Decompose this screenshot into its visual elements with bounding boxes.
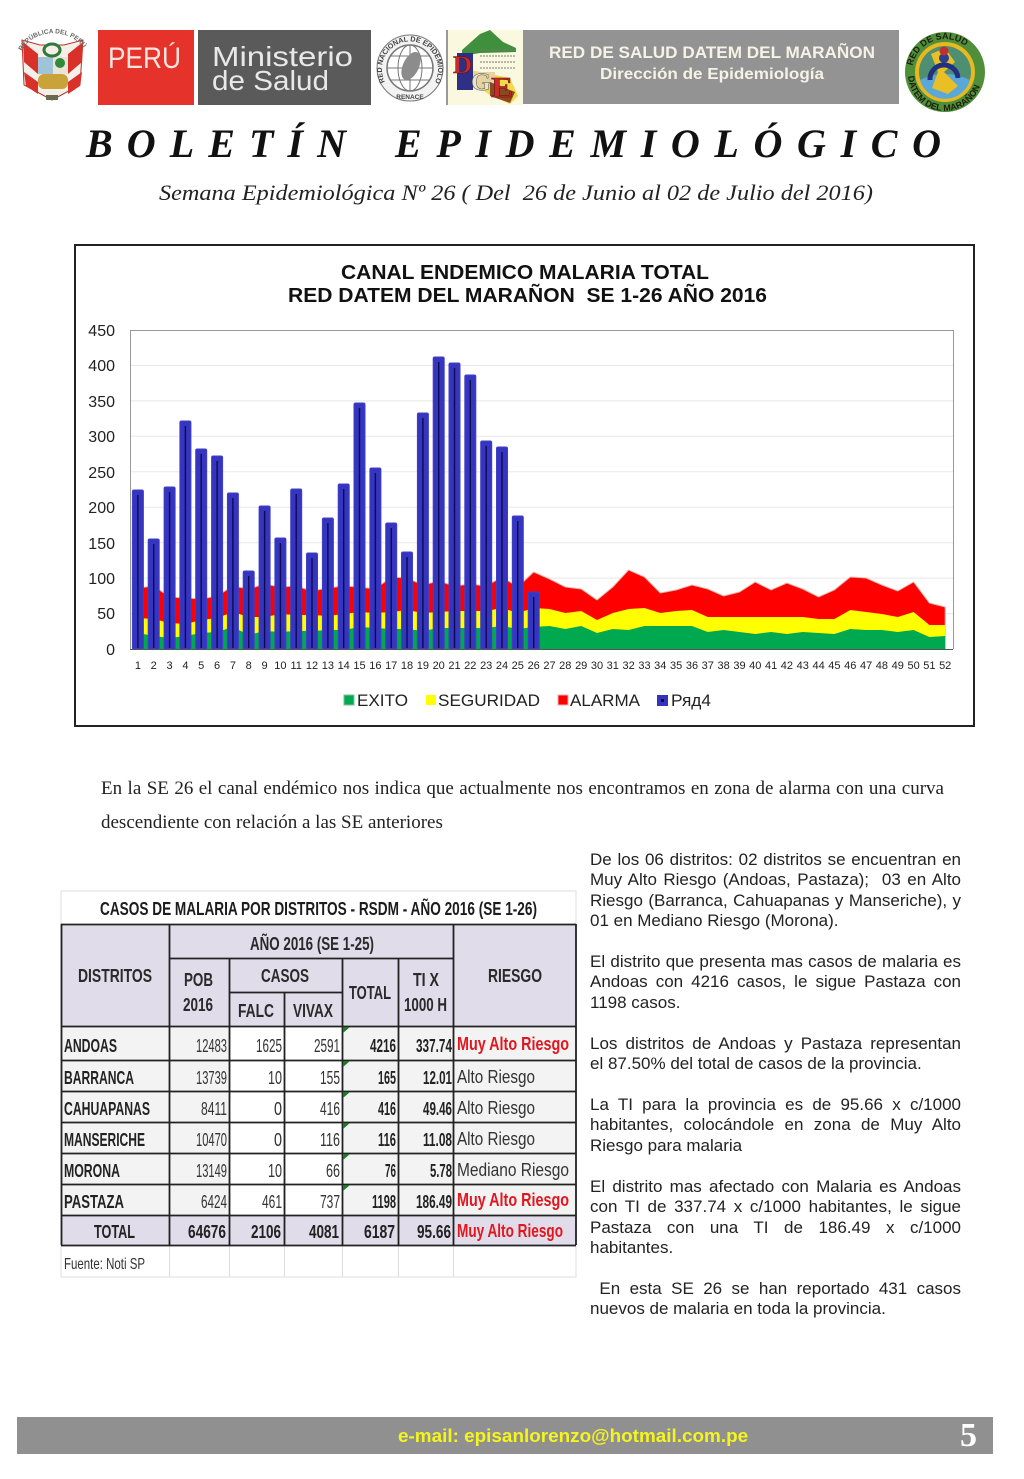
banner: red de salud [523, 30, 899, 104]
row: MANSERICHE: 10470 [196, 1130, 227, 1150]
text block: chart interpretation [101, 778, 944, 833]
x axis labels: 20 [433, 660, 445, 672]
table header: RIESGO [488, 965, 542, 986]
paragraph 4: La TI para la provincia es de 95.66 x c/1000 [590, 1095, 961, 1114]
row: PASTAZA: 6424 [201, 1192, 227, 1212]
x axis labels: 49 [892, 660, 904, 672]
table header: POB [184, 969, 213, 990]
row: PASTAZA: PASTAZA [64, 1192, 124, 1212]
row: TOTAL: 95.66 [417, 1221, 451, 1242]
y axis labels: 100 [88, 571, 115, 588]
paragraph 4 [590, 1095, 961, 1155]
page number: 5 [960, 1417, 977, 1454]
x axis labels: 3 [167, 660, 173, 672]
row: BARRANCA [64, 1067, 535, 1088]
x axis labels: 6 [214, 660, 220, 672]
table header: TI X [413, 969, 440, 990]
logo: RENACE globe [376, 34, 444, 102]
x axis labels: 7 [230, 660, 236, 672]
x axis labels: 51 [923, 660, 936, 672]
logo: Red de Salud Datem del Marañon seal: DATEM DEL MARAÑON [908, 76, 980, 112]
x axis labels: 48 [876, 660, 888, 672]
paragraph 3: el 87.50% del total de casos de la provincia. [590, 1054, 922, 1073]
table header: 2016 [183, 994, 213, 1015]
row: MANSERICHE: 116 [320, 1130, 340, 1150]
x axis labels: 23 [480, 660, 492, 672]
x axis labels: 5 [198, 660, 204, 672]
x axis labels: 8 [246, 660, 252, 672]
paragraph 2 [590, 952, 961, 1012]
x axis labels: 12 [306, 660, 318, 672]
row: TOTAL: TOTAL [94, 1221, 135, 1242]
row: MANSERICHE [64, 1129, 535, 1150]
paragraph 5: Pastaza con una TI de 186.49 x c/1000 [590, 1218, 961, 1237]
paragraph 6: nuevos de malaria en toda la provincia. [590, 1299, 886, 1318]
logo: DGE map: G [471, 69, 491, 96]
text block: chart interpretation: descendiente con relación a las SE anteriores [101, 812, 443, 833]
logo: DGE map: E [491, 72, 513, 104]
row: MANSERICHE: 0 [274, 1130, 282, 1150]
paragraph 1: De los 06 distritos: 02 distritos se encuentran en [590, 850, 961, 869]
row: BARRANCA: Alto Riesgo [457, 1067, 535, 1087]
x axis labels [135, 660, 951, 672]
row: MORONA: 13149 [196, 1161, 227, 1181]
title: EPIDEMIOLÓGICO [394, 121, 941, 166]
bars: Ряд4 weekly cases [132, 357, 539, 649]
x axis labels: 19 [417, 660, 429, 672]
row: CAHUAPANAS [64, 1098, 535, 1119]
y axis labels: 450 [88, 323, 115, 340]
y axis labels: 300 [88, 429, 115, 446]
x axis labels: 46 [844, 660, 856, 672]
legend: SEGURIDAD [438, 692, 540, 710]
paragraph 4: habitantes, colocándole en zona de Muy Alto [590, 1115, 961, 1134]
x axis labels: 40 [749, 660, 761, 672]
x axis labels: 30 [591, 660, 603, 672]
row: ANDOAS: 2591 [314, 1036, 340, 1056]
paragraph 5: con TI de 337.74 x c/1000 habitantes, le sigue [590, 1197, 961, 1216]
x axis labels: 9 [262, 660, 268, 672]
paragraph 2: Andoas con 4216 casos, le sigue Pastaza con [590, 972, 961, 991]
row: TOTAL: 6187 [364, 1221, 395, 1242]
x axis labels: 32 [622, 660, 635, 672]
row: TOTAL: 4081 [309, 1221, 339, 1242]
paragraph 2: El distrito que presenta mas casos de malaria es [590, 952, 961, 971]
row: MANSERICHE: 11.08 [423, 1130, 452, 1150]
logo: Ministerio de Salud [198, 30, 371, 105]
row: MORONA: 5.78 [430, 1161, 452, 1181]
x axis labels: 42 [781, 660, 793, 672]
row: CAHUAPANAS: CAHUAPANAS [64, 1099, 150, 1119]
row: CAHUAPANAS: 416 [320, 1099, 340, 1119]
x axis labels: 22 [464, 660, 476, 672]
table header [78, 933, 542, 1021]
row: ANDOAS: 337.74 [416, 1036, 452, 1056]
banner: red de salud: RED DE SALUD DATEM DEL MARAÑON [549, 42, 875, 62]
header logos band [18, 28, 985, 112]
legend: Ряд4 [671, 692, 711, 710]
logo: RENACE globe: RENACE [396, 94, 424, 101]
row: CAHUAPANAS: 8411 [201, 1099, 227, 1119]
area: alarma [138, 570, 945, 649]
x axis labels: 11 [290, 660, 302, 672]
legend [344, 692, 711, 710]
banner: red de salud: Dirección de Epidemiología [600, 66, 824, 83]
text block: district analysis [590, 850, 961, 1318]
row: ANDOAS: ANDOAS [64, 1036, 117, 1056]
table header: AÑO 2016 (SE 1-25) [250, 933, 374, 954]
paragraph 4: Riesgo para malaria [590, 1136, 742, 1155]
paragraph 1: Muy Alto Riesgo (Andoas, Pastaza); 03 en Alto [590, 870, 961, 889]
row: CAHUAPANAS: 416 [378, 1099, 396, 1119]
table header: FALC [238, 1000, 274, 1021]
row: BARRANCA: 10 [268, 1068, 282, 1088]
row: MORONA: 66 [326, 1161, 340, 1181]
icon: Peru coat of arms [18, 28, 88, 101]
logo: Ministerio de Salud: de Salud [212, 65, 329, 96]
logo: PERÚ red block: PERÚ [108, 42, 181, 75]
row: PASTAZA: 461 [262, 1192, 282, 1212]
title: BOLETÍN [85, 121, 348, 166]
x axis labels: 52 [939, 660, 951, 672]
row: BARRANCA: BARRANCA [64, 1068, 134, 1088]
chart title [288, 261, 767, 307]
row: ANDOAS: 4216 [370, 1036, 396, 1056]
y axis labels: 400 [88, 358, 115, 375]
chart title: CANAL ENDEMICO MALARIA TOTAL [341, 261, 709, 284]
row: BARRANCA: 155 [320, 1068, 340, 1088]
x axis labels: 39 [733, 660, 746, 672]
row: PASTAZA: 186.49 [416, 1192, 452, 1212]
icon: Peru coat of arms: REPÚBLICA DEL PERÚ [18, 28, 88, 50]
logo: PERÚ red block [98, 30, 194, 105]
legend: EXITO [357, 692, 408, 710]
area: exito [138, 626, 945, 649]
y axis labels: 200 [88, 500, 115, 517]
x axis labels: 38 [717, 660, 730, 672]
paragraph 2: 1198 casos. [590, 993, 680, 1012]
x axis labels: 14 [338, 660, 350, 672]
x axis labels: 13 [322, 660, 334, 672]
x axis labels: 26 [528, 660, 540, 672]
x axis labels: 25 [512, 660, 524, 672]
paragraph 5 [590, 1177, 961, 1257]
y axis labels: 0 [106, 642, 115, 659]
row: CAHUAPANAS: 0 [274, 1099, 282, 1119]
paragraph 6 [590, 1279, 961, 1318]
row: MANSERICHE: MANSERICHE [64, 1130, 145, 1150]
footer email: e-mail: episanlorenzo@hotmail.com.pe [398, 1426, 748, 1447]
paragraph 5: habitantes. [590, 1238, 673, 1257]
text block: chart interpretation: En la SE 26 el canal endémico nos indica que actualmente nos encontramos en zona de alarma con una curva [101, 778, 944, 799]
x axis labels: 34 [654, 660, 666, 672]
y axis labels: 250 [88, 465, 115, 482]
row: ANDOAS [64, 1034, 569, 1056]
table header: 1000 H [404, 994, 447, 1015]
x axis labels: 45 [828, 660, 841, 672]
y axis labels: 150 [88, 536, 115, 553]
row: BARRANCA: 165 [378, 1068, 396, 1088]
x axis labels: 17 [385, 660, 397, 672]
logo: DGE map [446, 30, 523, 105]
table header: TOTAL [349, 982, 391, 1003]
paragraph 3 [590, 1034, 961, 1073]
paragraph 1 [590, 850, 961, 930]
panel: endemic channel chart [74, 244, 975, 727]
logo: Red de Salud Datem del Marañon seal [905, 32, 985, 112]
table header: VIVAX [293, 1000, 333, 1021]
paragraph 3: Los distritos de Andoas y Pastaza representan [590, 1034, 961, 1053]
x axis labels: 35 [670, 660, 682, 672]
x axis labels: 37 [702, 660, 714, 672]
x axis labels: 15 [353, 660, 366, 672]
row: ANDOAS: 12483 [196, 1036, 227, 1056]
paragraph 1: 01 en Mediano Riesgo (Morona). [590, 911, 839, 930]
y axis labels: 350 [88, 394, 115, 411]
paragraph 5: El distrito mas afectado con Malaria es Andoas [590, 1177, 961, 1196]
x axis labels: 27 [543, 660, 556, 672]
logo: Ministerio de Salud: Ministerio [212, 41, 353, 72]
row: MORONA: 10 [268, 1161, 282, 1181]
row: TOTAL [94, 1220, 563, 1242]
area: seguridad [138, 608, 945, 649]
x axis labels: 44 [812, 660, 825, 672]
row: CAHUAPANAS: 49.46 [423, 1099, 452, 1119]
title [85, 121, 941, 205]
row: MORONA [64, 1160, 569, 1181]
x axis labels: 18 [401, 660, 413, 672]
x axis labels: 4 [182, 660, 188, 672]
x axis labels: 36 [686, 660, 698, 672]
x axis labels: 29 [575, 660, 587, 672]
logo: DGE map: D [453, 52, 472, 79]
chart title: RED DATEM DEL MARAÑON SE 1-26 AÑO 2016 [288, 284, 767, 307]
row: TOTAL: 64676 [188, 1221, 226, 1242]
paragraph 1: Riesgo (Barranca, Cahuapanas y Manseriche), y [590, 891, 961, 910]
x axis labels: 1 [135, 660, 141, 672]
x axis labels: 43 [797, 660, 809, 672]
x axis labels: 50 [907, 660, 920, 672]
row: PASTAZA: 1198 [372, 1192, 396, 1212]
table: malaria cases by district [60, 890, 577, 1278]
y axis labels [88, 323, 115, 659]
row: BARRANCA: 13739 [196, 1068, 227, 1088]
row: PASTAZA [64, 1190, 569, 1212]
table source: Fuente: Noti SP [64, 1256, 145, 1273]
row: MORONA: MORONA [64, 1161, 120, 1181]
x axis labels: 16 [369, 660, 382, 672]
paragraph 6: En esta SE 26 se han reportado 431 casos [599, 1279, 961, 1298]
row: BARRANCA: 12.01 [423, 1068, 452, 1088]
row: TOTAL: 2106 [251, 1221, 281, 1242]
row: MANSERICHE: 116 [378, 1130, 396, 1150]
x axis labels: 41 [765, 660, 777, 672]
logo: Red de Salud Datem del Marañon seal: RED DE SALUD [906, 32, 968, 66]
row: PASTAZA: 737 [320, 1192, 340, 1212]
x axis labels: 21 [448, 660, 461, 672]
row: MORONA: 76 [385, 1161, 396, 1181]
row: MORONA: Mediano Riesgo [457, 1160, 569, 1180]
row: CAHUAPANAS: Alto Riesgo [457, 1098, 535, 1118]
row: MANSERICHE: Alto Riesgo [457, 1129, 535, 1149]
x axis labels: 2 [151, 660, 157, 672]
table header: CASOS [261, 965, 309, 986]
x axis labels: 10 [274, 660, 287, 672]
x axis labels: 28 [559, 660, 571, 672]
x axis labels: 24 [496, 660, 508, 672]
table header: DISTRITOS [78, 965, 152, 986]
x axis labels: 31 [607, 660, 619, 672]
legend: ALARMA [570, 692, 640, 710]
x axis labels: 47 [860, 660, 872, 672]
y axis labels: 50 [97, 606, 115, 623]
row: ANDOAS: 1625 [256, 1036, 282, 1056]
subtitle: Semana Epidemiológica Nº 26 ( Del 26 de Junio al 02 de Julio del 2016) [159, 180, 873, 205]
footer bar [17, 1417, 993, 1454]
x axis labels: 33 [638, 660, 651, 672]
